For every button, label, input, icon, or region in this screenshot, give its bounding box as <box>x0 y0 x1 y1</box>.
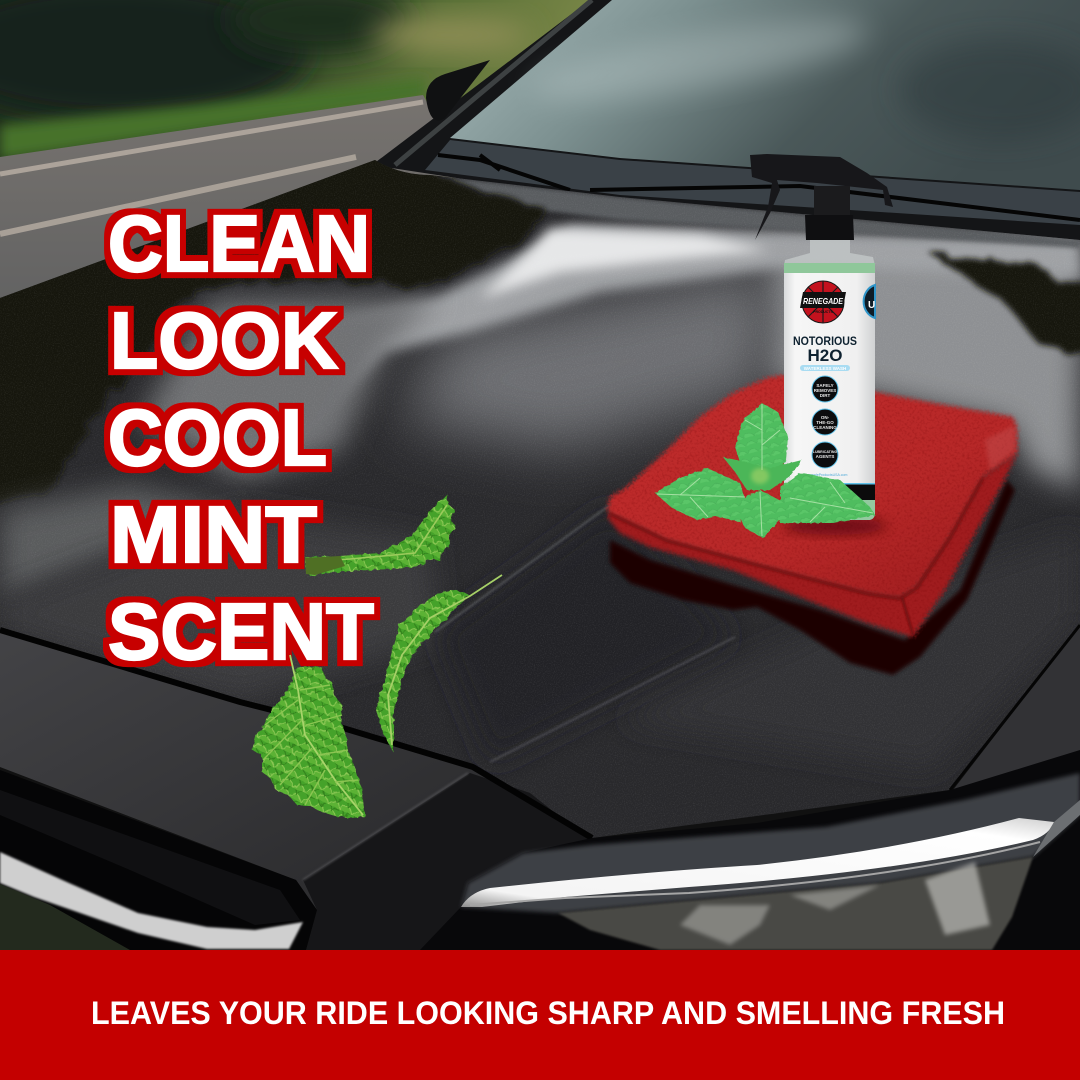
icon: flying mint leaf, top <box>305 494 456 576</box>
towel lower layer <box>607 453 1017 637</box>
footer tagline: LEAVES YOUR RIDE LOOKING SHARP AND SMELLING FRESH <box>91 995 1005 1031</box>
bottle trigger sprayer <box>750 154 893 240</box>
footer banner <box>0 950 1080 1080</box>
bottle product name: WATERLESS WASH <box>804 366 846 371</box>
bottle feature badges: THE-GO <box>816 420 834 425</box>
tree reflection on right of hood <box>930 255 1080 360</box>
bottle feature badges: DIRT <box>820 393 830 398</box>
bottle feature badges: AGENTS <box>816 454 834 459</box>
bottle body <box>784 263 875 520</box>
hood grain <box>0 150 1080 850</box>
headline: clean look cool mint scent: MINT <box>110 490 317 579</box>
product bottle: Notorious H2O <box>750 154 893 520</box>
bottle product name: H2O <box>808 346 842 365</box>
tree reflection on left of hood <box>0 150 550 510</box>
lower left hood sheen <box>0 485 240 600</box>
headline: clean look cool mint scent <box>108 199 374 676</box>
right fender <box>950 625 1080 790</box>
right headlight <box>420 750 1080 950</box>
left grille and chrome trim <box>0 770 317 950</box>
icon: mint sprig on towel <box>655 403 875 538</box>
glossy hood <box>0 150 1080 850</box>
bottle website and base: RenegadeProductsUSA.com <box>803 473 847 477</box>
roadside grass and trees <box>0 0 588 157</box>
bottle feature badges: CLEANING <box>813 425 837 430</box>
bottle feature badges: REMOVES <box>814 388 836 393</box>
hood grainy grey patch <box>140 298 440 480</box>
bottle feature badges <box>812 376 838 468</box>
windshield, pillar, wipers and mirror <box>372 0 1080 240</box>
hood mid grey wedge <box>400 262 780 450</box>
bottle feature badges: ON- <box>821 415 830 420</box>
towel reflection on hood <box>610 480 1015 675</box>
bottle feature badges: LUBRICATING <box>813 450 837 454</box>
icon: flying mint leaf, bottom <box>252 655 365 818</box>
towel <box>607 375 1017 637</box>
headline: clean look cool mint scent: CLEAN <box>108 199 370 288</box>
hood sky reflection, right side <box>770 245 1080 490</box>
hood rim strip <box>430 175 1080 248</box>
headline: clean look cool mint scent: COOL <box>108 393 327 482</box>
front nose panel <box>0 627 594 910</box>
bottle neck <box>784 240 875 266</box>
headline: clean look cool mint scent: SCENT <box>108 587 374 676</box>
icon: flying mint leaf, middle <box>376 575 502 752</box>
bottle logo: Renegade Products: PRODUCTS <box>813 310 833 314</box>
bottle product name <box>793 336 857 371</box>
bottle badge: U <box>868 300 875 311</box>
headline: clean look cool mint scent: LOOK <box>110 296 338 385</box>
lower right panels <box>446 529 704 739</box>
bottle website and base <box>784 473 875 520</box>
road with lane lines <box>0 95 470 310</box>
bottle green band <box>784 263 875 273</box>
bottle logo: Renegade Products: RENEGADE <box>803 296 843 306</box>
hood bright diagonal band <box>352 217 1080 383</box>
towel upper layer <box>607 375 1017 598</box>
bottle feature badges: SAFELY <box>816 383 834 388</box>
bottle logo: Renegade Products <box>800 281 846 323</box>
bottle badge <box>864 285 875 318</box>
bottle product name: NOTORIOUS <box>793 336 857 348</box>
